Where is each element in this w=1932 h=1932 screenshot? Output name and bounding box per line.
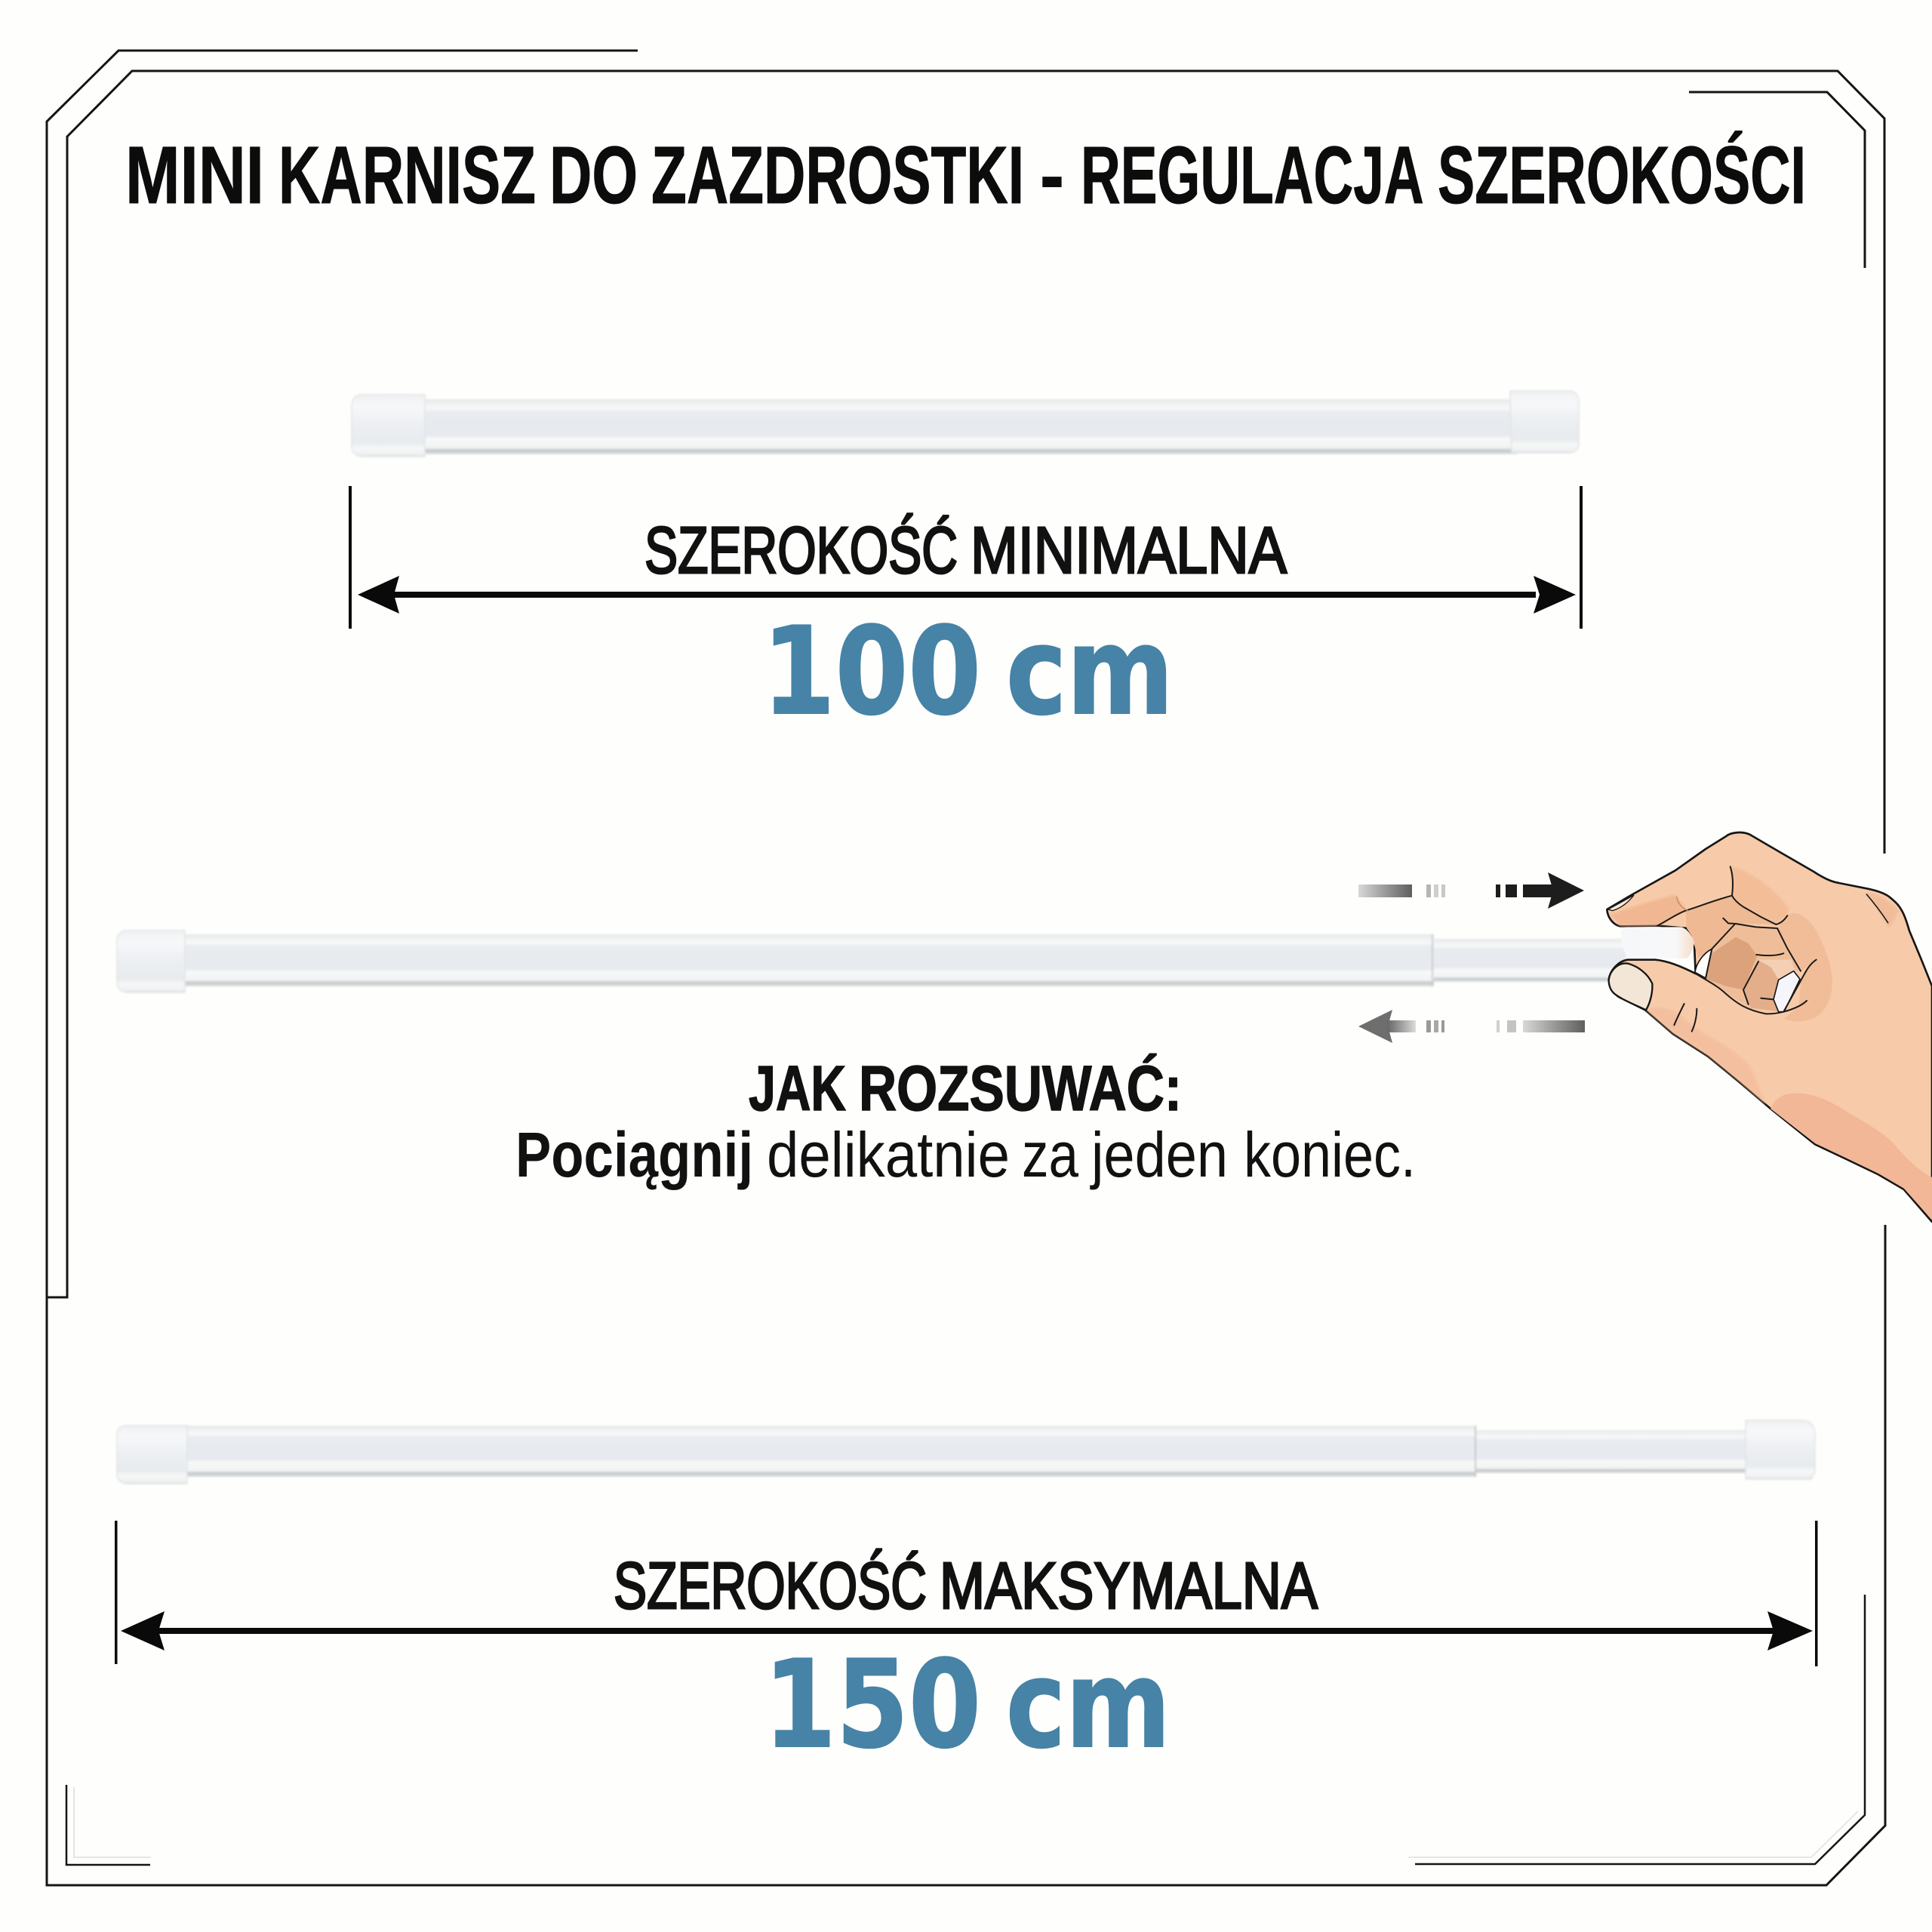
icon: hand pulling the rod end xyxy=(1607,832,1932,1222)
title: KARNISZ xyxy=(278,129,536,220)
label: maximum width: MAKSYMALNA xyxy=(940,1549,1318,1623)
title: ZAZDROSTKI xyxy=(651,129,1024,220)
index finger shading xyxy=(1610,894,1687,926)
gap beside the thumb xyxy=(1695,949,1712,978)
second curled finger xyxy=(1743,961,1779,1011)
curled fingers background xyxy=(1706,924,1801,1013)
title: MINI xyxy=(125,129,264,220)
wrist shading xyxy=(1770,1093,1932,1220)
value: 150 cm: 150 xyxy=(764,1634,981,1775)
finger and palm contours xyxy=(1657,866,1888,1032)
hand silhouette xyxy=(1607,832,1932,1222)
first curled finger xyxy=(1706,937,1757,990)
area below the index finger xyxy=(1685,896,1776,958)
title: REGULACJA xyxy=(1081,129,1423,220)
label: maximum width: SZEROKOŚĆ xyxy=(614,1549,927,1623)
label: minimum width: MINIMALNA xyxy=(971,514,1287,587)
third curled finger xyxy=(1758,960,1795,979)
instructions body: koniec. xyxy=(1244,1119,1416,1190)
instructions heading: JAK xyxy=(749,1053,846,1124)
instructions body: jeden xyxy=(1089,1119,1228,1190)
instructions heading: ROZSUWAĆ: xyxy=(859,1053,1182,1124)
direction arrow: slide left xyxy=(1358,1010,1585,1043)
thumb base shading xyxy=(1647,1008,1766,1104)
rod end cap held by fingers xyxy=(1621,927,1694,958)
instructions xyxy=(515,1053,1416,1190)
middle rod: being extended xyxy=(117,931,1626,992)
instructions body: za xyxy=(1022,1119,1078,1190)
instructions body: delikatnie xyxy=(767,1119,1010,1190)
title: - xyxy=(1040,129,1064,220)
index fingernail xyxy=(1608,895,1634,911)
bottom rod: maximum width xyxy=(117,1420,1815,1484)
value: 150 cm: cm xyxy=(1006,1634,1171,1775)
palm hollow shadow xyxy=(1777,913,1832,1022)
second knuckle area xyxy=(1730,866,1789,924)
dimension: minimum width xyxy=(349,486,1583,629)
title: DO xyxy=(549,129,638,220)
value: 100 cm: cm xyxy=(1006,601,1174,742)
gap near the palm xyxy=(1774,971,1800,1012)
value: 100 cm: 100 xyxy=(762,601,981,742)
instructions body: Pociągnij xyxy=(515,1119,753,1190)
dimension: maximum width xyxy=(115,1521,1817,1666)
label: minimum width: SZEROKOŚĆ xyxy=(645,514,958,587)
thumbnail xyxy=(1609,963,1652,1010)
direction arrow: pull right xyxy=(1358,872,1584,909)
knuckle shading xyxy=(1866,892,1900,928)
top rod: minimum width xyxy=(352,391,1579,457)
